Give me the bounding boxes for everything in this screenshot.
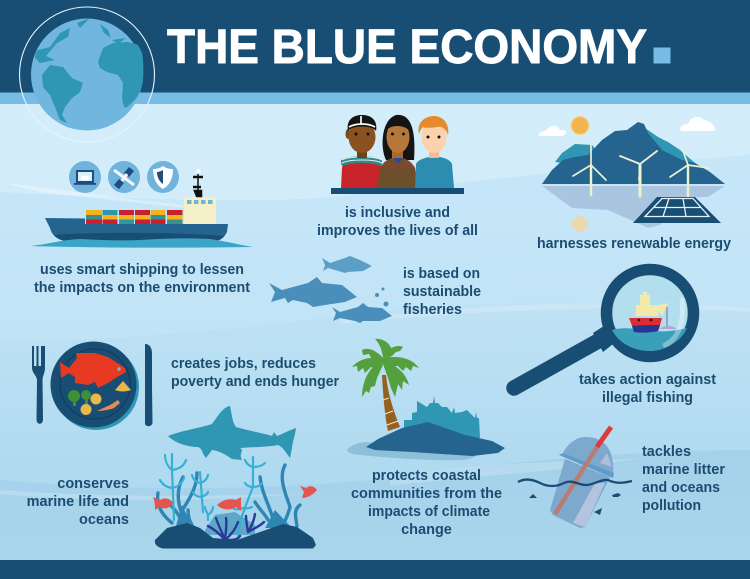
caption: coastal communities: change: [401, 522, 452, 538]
title square accent: [654, 48, 670, 64]
fish illustration: [269, 256, 392, 323]
platform: [331, 188, 464, 194]
icon: fork: [32, 346, 45, 424]
caption: marine litter: and oceans: [642, 480, 720, 496]
caption: smart shipping: uses smart shipping to lessen: [40, 262, 244, 278]
lens glare: [665, 300, 683, 345]
mountain teal ridge: [555, 122, 695, 170]
caption: fisheries: sustainable: [403, 284, 481, 300]
people illustration: [331, 115, 464, 194]
caption: smart shipping: the impacts on the environment: [34, 280, 250, 296]
caption: jobs: [171, 356, 339, 390]
caption: coastal communities: impacts of climate: [368, 504, 490, 520]
person: red top: [341, 115, 385, 188]
renewable energy illustration: [539, 116, 725, 232]
caption: marine life: marine life and: [27, 494, 129, 510]
coastal island illustration: [347, 339, 505, 460]
clouds: [539, 117, 715, 136]
palm leaves: [352, 339, 419, 397]
caption: coastal communities: protects coastal: [372, 468, 481, 484]
broccoli: [68, 390, 80, 402]
caption: renewable energy: harnesses renewable energy: [537, 236, 731, 252]
caption: inclusive: improves the lives of all: [317, 223, 478, 239]
signal beams: [0, 182, 184, 208]
orange vegetables: [90, 394, 102, 404]
caption: coastal communities: [351, 468, 502, 538]
caption: marine litter: pollution: [642, 498, 701, 514]
person: brown sweater: [377, 115, 418, 188]
red fish: [60, 353, 126, 388]
rock: [155, 523, 316, 548]
mountain: [542, 122, 725, 184]
red reef fish: [153, 486, 317, 511]
person: blue sweater: [415, 116, 454, 188]
caption: illegal fishing: [579, 372, 716, 406]
solar panel: [633, 197, 721, 223]
handle: [514, 340, 600, 388]
ship bridge and mast: [184, 169, 216, 224]
bubbles: [384, 302, 388, 306]
caption: marine life: [27, 476, 129, 528]
smart shipping illustration: [0, 161, 253, 248]
fishing boat: [629, 292, 677, 333]
palm trunk: [382, 375, 400, 431]
header banner: [0, 0, 750, 104]
caption: smart shipping: [34, 262, 250, 296]
icon: satellite: [108, 161, 140, 193]
small fish: [322, 256, 372, 273]
caption: coastal communities: communities from the: [351, 486, 502, 502]
title: THE BLUE ECONOMY: [167, 21, 647, 74]
shark illustration: [168, 406, 296, 460]
mountain reflection: [542, 186, 725, 228]
water in lens: [612, 328, 687, 351]
lemon: [115, 381, 131, 392]
container stacks: [86, 210, 182, 224]
caption: marine litter: [642, 444, 725, 514]
sun reflection: [572, 216, 588, 232]
magnifying glass illustration: [514, 270, 694, 388]
caption: fisheries: [403, 266, 481, 318]
straw: [555, 447, 597, 514]
caption: inclusive: is inclusive and: [345, 205, 450, 221]
lens rim: [606, 270, 694, 356]
globe icon: [20, 7, 154, 142]
wind turbines: [573, 145, 709, 196]
sun: [571, 116, 589, 134]
cup dome: [563, 437, 613, 475]
caption: illegal fishing: illegal fishing: [602, 390, 693, 406]
large fish: [269, 277, 357, 307]
island: [366, 422, 505, 456]
cup lid: [559, 453, 614, 478]
caption: marine litter: marine litter: [642, 462, 725, 478]
caption: jobs: creates jobs, reduces: [171, 356, 316, 372]
caption: jobs: poverty and ends hunger: [171, 374, 339, 390]
reef mound: [205, 512, 255, 535]
caption: illegal fishing: takes action against: [579, 372, 716, 388]
plate: [53, 344, 139, 430]
plastic cup illustration: [518, 427, 632, 528]
coral reef illustration: [153, 454, 317, 548]
icon: knife: [145, 344, 152, 426]
light coral: [160, 454, 265, 538]
dark purple coral: [208, 514, 264, 540]
water line: [518, 479, 632, 486]
caption: marine litter: tackles: [642, 444, 691, 460]
footer bar: [0, 560, 750, 579]
water: [30, 238, 253, 248]
caption: marine life: oceans: [79, 512, 129, 528]
caption: fisheries: fisheries: [403, 302, 462, 318]
icon: shield: [147, 161, 179, 193]
caption: fisheries: is based on: [403, 266, 480, 282]
lower fish: [332, 303, 392, 323]
small fish: [529, 493, 621, 515]
place setting illustration: [32, 342, 152, 430]
caption: inclusive: [317, 205, 478, 239]
city skyline: [404, 396, 480, 438]
mid seaweed: [158, 465, 300, 526]
icon: laptop: [69, 161, 101, 193]
caption: marine life: conserves: [57, 476, 129, 492]
island shadow: [347, 442, 480, 460]
ship hull: [45, 218, 228, 241]
cup body: [550, 459, 610, 528]
